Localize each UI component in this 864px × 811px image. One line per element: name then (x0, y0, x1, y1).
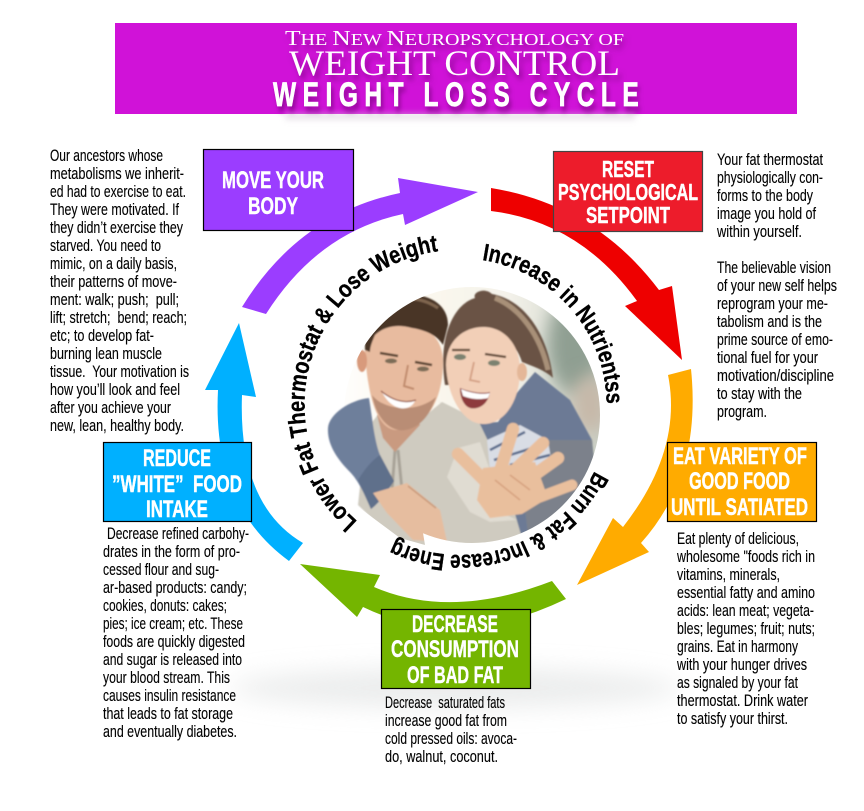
curved text: Burn Fat & Increase Energ: Burn Fat & Increase Energ (390, 472, 609, 571)
title line: Weight Control: WEIGHT CONTROL (289, 43, 620, 83)
sleeve cuff with stripes (487, 425, 552, 470)
text block: move your body: ed had to exercise to eat. (50, 183, 186, 201)
title line: Weight Loss Cycle: WEIGHT LOSS CYCLE (273, 76, 639, 114)
text block: reset setpoint: to stay with the (717, 385, 802, 403)
text block: move your body: metabolisms we inherit- (50, 165, 184, 183)
text block: reset setpoint: physiologically con- (717, 169, 823, 187)
arrow: purple (242, 178, 478, 314)
heading: move your body: MOVE YOUR (222, 167, 324, 194)
heading: reset psychological setpoint: RESET (602, 156, 654, 182)
text block: reduce white food: foods are quickly digested (103, 633, 245, 651)
text block: reset setpoint: image you hold of (717, 205, 816, 223)
text block: reduce white food: causes insulin resistance (103, 687, 236, 705)
text block: decrease bad fat: do, walnut, coconut. (385, 748, 498, 766)
text block: move your body: tissue. Your motivation is (50, 363, 189, 381)
text block: reduce white food: Decrease refined carbohy- (107, 525, 249, 543)
man smile (382, 392, 415, 408)
text block: reset setpoint: reprogram your me- (717, 295, 828, 313)
woman sleeve around man (327, 397, 380, 494)
heading: reset psychological setpoint: PSYCHOLOGICAL (558, 179, 698, 205)
text block: reduce white food: cookies, donuts: cakes; (103, 597, 227, 615)
man hair (365, 295, 448, 352)
text block: eat variety: wholesome "foods rich in (676, 548, 815, 566)
heading: reduce white food intake: REDUCE (143, 445, 211, 472)
curved text: Increase in Nutrientss: Increase in Nutrientss (483, 244, 620, 404)
text block: move your body: their patterns of move- (50, 273, 177, 291)
arrow: orange (577, 369, 693, 585)
heading: reset psychological setpoint: SETPOINT (586, 202, 670, 228)
heading: decrease consumption of bad fat: OF BAD FAT (407, 662, 503, 689)
text block: reset setpoint: Your fat thermostat (717, 151, 823, 169)
woman face (446, 327, 520, 424)
heading: reduce white food intake (112, 445, 242, 523)
reaching hand (458, 429, 572, 497)
text block: decrease bad fat (385, 694, 517, 766)
text block: reset setpoint: forms to the body (717, 187, 814, 205)
text block: move your body: after you achieve your (50, 399, 171, 417)
heading: decrease consumption of bad fat: DECREASE (412, 611, 498, 638)
text block: reset setpoint: tional fuel for your (717, 349, 818, 367)
man neck (377, 415, 420, 452)
text block: move your body: starved. You need to (50, 237, 161, 255)
text block: eat variety: with your hunger drives (676, 656, 807, 674)
heading: reset psychological setpoint (558, 156, 698, 228)
text block: move your body: they didn’t exercise they (50, 219, 184, 237)
text block: reset setpoint: The believable vision (717, 259, 831, 277)
photo: smiling couple (327, 287, 600, 545)
text block: eat variety: as signaled by your fat (677, 674, 798, 692)
heading: eat variety of good food until satiated: UNTIL SATIATED (671, 494, 808, 521)
text block: reduce white food: that leads to fat storage (103, 705, 233, 723)
arrow: red (491, 188, 682, 360)
text block: move your body: They were motivated. If (50, 201, 179, 219)
text block: reset setpoint: program. (717, 403, 767, 421)
title banner (115, 23, 797, 120)
text block: eat variety: Eat plenty of delicious, (677, 530, 799, 548)
text block: eat variety: thermostat. Drink water (677, 692, 808, 710)
heading: reduce white food intake: ”WHITE” FOOD (112, 471, 242, 498)
man brows and eyes (380, 353, 432, 365)
text block: move your body: Our ancestors whose (50, 147, 163, 165)
man head (365, 324, 443, 430)
text block: eat variety (676, 530, 815, 728)
woman hair (443, 291, 553, 385)
text block: reduce white food: cessed flour and sug- (103, 561, 219, 579)
title line: The New Neuropsychology of: THE NEW NEUROPSYCHOLOGY OF (285, 26, 624, 50)
text block: move your body: how you’ll look and feel (50, 381, 180, 399)
text block: reduce white food: drates in the form of pro- (103, 543, 240, 561)
text block: reset setpoint (716, 151, 837, 421)
text block: reduce white food: your blood stream. This (103, 669, 230, 687)
text block: reset setpoint: tabolism and is the (717, 313, 822, 331)
curved text: Lower Fat Thermostat & Lose Weight: Lower Fat Thermostat & Lose Weight (288, 236, 438, 533)
heading: decrease consumption of bad fat (391, 611, 519, 689)
heading: move your body (222, 167, 324, 220)
text block: decrease bad fat: increase good fat from (385, 712, 507, 730)
text block: reduce white food (103, 525, 249, 741)
arrow: green (300, 564, 566, 628)
text block: eat variety: grains. Eat in harmony (677, 638, 799, 656)
panel: eat variety of good food (668, 442, 816, 522)
floor shadow (230, 668, 680, 708)
woman mouth (460, 388, 490, 408)
text block: eat variety: vitamins, minerals, (677, 566, 780, 584)
text block: decrease bad fat: Decrease saturated fats (385, 694, 505, 712)
heading: eat variety of good food until satiated (671, 443, 808, 521)
woman hand on chest (373, 483, 447, 542)
text block: reduce white food: and sugar is released into (103, 651, 242, 669)
text block: move your body: etc; to develop fat- (50, 327, 154, 345)
text block: reset setpoint: within yourself. (716, 223, 802, 241)
text block: eat variety: essential fatty and amino (677, 584, 815, 602)
text block: eat variety: bles; legumes; fruit; nuts; (677, 620, 815, 638)
arrow: cyan (205, 323, 303, 561)
text block: decrease bad fat: cold pressed oils: avoca- (385, 730, 517, 748)
text block: reduce white food: and eventually diabetes. (103, 723, 237, 741)
text block: move your body: mimic, on a daily basis, (50, 255, 177, 273)
text block: move your body: ment: walk; push; pull; (50, 291, 179, 309)
text block: reduce white food: pies; ice cream; etc. These (103, 615, 243, 633)
text block: reduce white food: ar-based products: candy; (103, 579, 247, 597)
woman hoodie (479, 372, 592, 534)
text block: move your body: burning lean muscle (50, 345, 162, 363)
text block: eat variety: acids: lean meat; vegeta- (677, 602, 814, 620)
heading: decrease consumption of bad fat: CONSUMPTION (391, 636, 519, 663)
panel: reduce white food intake (104, 442, 252, 523)
panel: move your body (204, 150, 354, 230)
text block: move your body (50, 147, 189, 435)
man hoodie (358, 402, 525, 548)
heading: move your body: BODY (248, 193, 298, 220)
heading: eat variety of good food until satiated: GOOD FOOD (689, 468, 790, 495)
text block: reset setpoint: motivation/discipline (717, 367, 834, 385)
heading: reduce white food intake: INTAKE (146, 496, 208, 523)
text block: move your body: new, lean, healthy body. (50, 417, 184, 435)
panel: decrease consumption of bad fat (382, 610, 530, 689)
text block: move your body: lift; stretch; bend; reach; (50, 309, 187, 327)
panel: reset psychological setpoint (554, 152, 702, 232)
text block: eat variety: to satisfy your thirst. (677, 710, 788, 728)
